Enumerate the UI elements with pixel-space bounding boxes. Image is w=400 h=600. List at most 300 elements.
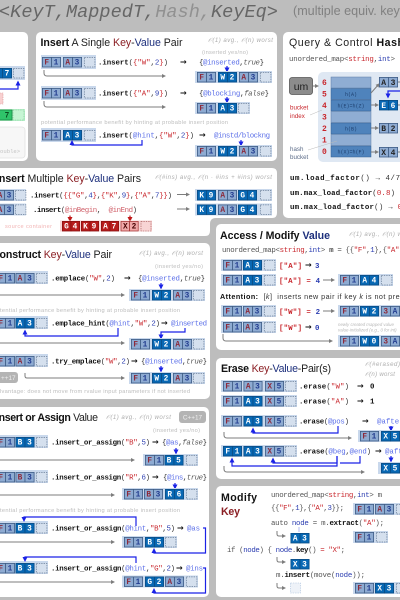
result row: W2 inserted	[195, 71, 272, 83]
row: erase range	[221, 445, 400, 472]
badge: C++17: ++17	[1, 375, 16, 382]
row: read W: A	[245, 325, 250, 333]
row: insert W: 1	[54, 60, 59, 68]
row: insert new R	[0, 470, 207, 495]
row: write A: 3	[255, 278, 260, 286]
code: extract node: auto node = m.extract("A");	[271, 520, 384, 528]
result row: B5: 1	[157, 458, 162, 466]
complexity note	[365, 361, 400, 378]
row: insert new R: →	[152, 473, 159, 482]
final map and empty node: 1	[367, 586, 372, 594]
panel: modify key	[216, 486, 400, 597]
diagram: hash table buckets: 1	[322, 136, 327, 146]
row: erase at position: 3	[255, 419, 260, 427]
row: emplace: →	[124, 274, 131, 283]
row: emplace: 1	[8, 276, 13, 284]
result row: emplace: W	[154, 293, 159, 301]
result row: hinted B5: B	[147, 540, 152, 548]
source container cells: 2	[132, 224, 137, 232]
result row: hinted G2: 1	[136, 579, 141, 587]
row: insert initializer list: A	[220, 193, 225, 201]
code: change key: if (node) { node.key() = "X";	[227, 547, 345, 555]
note: value-initialised: newly created mapped value	[338, 322, 394, 327]
diagram: hash table buckets: bucket	[290, 154, 309, 161]
row: assign existing B: B	[18, 440, 23, 448]
row: erase range: →	[375, 447, 382, 456]
result row: emplace: 3	[185, 293, 190, 301]
row: emplace_hint: @inserted	[171, 320, 207, 328]
result row: W0: A	[393, 339, 398, 347]
diagram: hash table buckets: A	[381, 79, 386, 88]
row: emplace: A	[18, 276, 23, 284]
row: insert new R: {@ins,true}	[163, 474, 207, 482]
row: insert A: A	[65, 91, 70, 99]
result row: R6: 6	[177, 492, 182, 500]
diagram: hash table buckets: E	[381, 103, 386, 111]
panel: construct key-value pair	[0, 243, 210, 399]
label: source container: source container	[5, 224, 52, 230]
row: hinted insert G: 1	[8, 566, 13, 574]
row: erase range: 1	[235, 449, 240, 457]
row: insert W: F	[44, 60, 49, 68]
row: insert W: →	[180, 58, 187, 67]
row: try_emplace: {@inserted,true}	[141, 358, 207, 366]
row: write W: F	[225, 309, 230, 317]
row: erase A: X	[267, 399, 272, 407]
row: hinted insert G: 3	[27, 566, 32, 574]
result row: A3 already present: 3	[230, 106, 235, 114]
source container cells: X	[123, 224, 128, 232]
result row: emplace_hint: 1	[143, 342, 148, 350]
row: write A: ["A"] = 4	[279, 278, 321, 286]
row: erase W: 1	[235, 384, 240, 392]
row: insert W: {@inserted,true}	[199, 59, 264, 67]
cells: initial map	[353, 503, 400, 515]
result row: R6: F	[126, 492, 131, 500]
result row: A3 already present: 1	[209, 106, 214, 114]
badge: C++17	[0, 372, 18, 383]
row: read A: ["A"]	[279, 263, 302, 271]
row: try_emplace: 1	[8, 359, 13, 367]
cells: initial map: 3	[387, 507, 392, 515]
row: hinted assign B: 3	[27, 526, 32, 534]
result row: W2 inserted with hint	[195, 145, 272, 157]
row: insert A: {@blocking,false}	[199, 90, 269, 98]
row: insert with hint: .insert(@hint,{"W",2})	[98, 132, 194, 140]
result row: after erase at position: X	[383, 434, 388, 442]
result row: A3 already present: F	[199, 106, 204, 114]
diagram: hash table buckets: 4	[322, 102, 327, 111]
complexity note: 𝒪(1) avg., 𝒪(n) worst	[139, 250, 203, 257]
row: insert A: 1	[54, 91, 59, 99]
code: get max load factor: um.max_load_factor() → 0	[290, 204, 400, 212]
row: write W	[221, 305, 400, 317]
heading: insert a single pair: Insert A Single Key-Value Pair	[40, 37, 183, 49]
result row: emplace_hint: 3	[185, 342, 190, 350]
diagram: hash table buckets: X	[381, 149, 386, 158]
panel: left partial panel: ouble>	[0, 148, 21, 155]
diagram: hash table buckets: B	[381, 125, 386, 134]
result row: try_emplace: A	[175, 376, 180, 384]
result row: R6: 3	[156, 492, 161, 500]
row: write A: A	[245, 278, 250, 286]
row: erase W: .erase("W")	[299, 383, 349, 391]
row: emplace: 3	[27, 276, 32, 284]
row: try_emplace: A	[18, 359, 23, 367]
diagram: hash table buckets: 4	[391, 149, 396, 158]
diagram: hash table buckets: 5	[322, 90, 327, 100]
note: value-initialised	[338, 322, 397, 332]
heading: modify key: Modify	[221, 492, 257, 504]
row: erase at position: 5	[277, 419, 282, 427]
result row: R6: B	[146, 492, 151, 500]
row: write W: 3	[383, 309, 388, 317]
row: insert with hint: A	[65, 133, 70, 141]
row: hinted assign B: .insert_or_assign(@hint,"B",5)	[51, 525, 175, 533]
row: read A: F	[225, 263, 230, 271]
cells: initial map: F	[357, 507, 362, 515]
badge: C++17	[179, 411, 206, 423]
row: insert initializer list: 3	[230, 193, 235, 201]
row: write A: 1	[352, 278, 357, 286]
changed node: X	[293, 562, 298, 570]
result row: W2 inserted: 3	[251, 75, 256, 83]
row: insert iterator range: 3	[7, 207, 12, 215]
heading: modify key	[221, 492, 257, 518]
row: write A	[221, 274, 393, 286]
row: erase at position: .erase(@pos)	[299, 418, 349, 426]
diagram: hash table buckets: bucket	[290, 104, 309, 112]
row: emplace	[0, 271, 205, 295]
result row: hinted B5	[122, 536, 177, 548]
row: insert with hint: 1	[54, 133, 59, 141]
result row: try_emplace: 1	[143, 376, 148, 384]
panel: insert multiple key-value pairs	[0, 168, 277, 236]
row: erase W: X	[267, 384, 272, 392]
diagram: hash table buckets: h(E)=h(Z)	[337, 104, 365, 110]
row: insert initializer list: 3	[7, 193, 12, 201]
result row: B5: F	[147, 458, 152, 466]
row: erase W: 5	[277, 384, 282, 392]
source container cells: K	[83, 224, 88, 232]
diagram: hash table buckets: 6	[322, 79, 327, 88]
result row: W2 inserted: W	[220, 75, 225, 83]
row: hinted assign B	[0, 517, 206, 553]
row: insert initializer list: 9	[209, 193, 214, 201]
row: insert W: 3	[75, 60, 80, 68]
note: hinting benefit: potential performance benefit by hinting at probable insert position	[41, 120, 228, 126]
diagram: hash table buckets: h(A)	[345, 92, 357, 98]
diagram: hash table buckets: 3	[391, 79, 396, 88]
row: hinted insert G: @ins	[186, 565, 203, 573]
source container cells: 4	[73, 224, 78, 232]
row: erase range: F	[225, 449, 230, 457]
row: erase at position: 1	[235, 419, 240, 427]
cells: initial map: A	[377, 507, 382, 515]
header: template signature: <KeyT,MappedT,Hash,KeyEq>	[0, 2, 278, 23]
row: assign existing B: {@as,false}	[162, 439, 207, 447]
diagram: hash table buckets: 3	[322, 114, 327, 122]
row: read A: A	[245, 263, 250, 271]
row: hinted insert G: .insert_or_assign(@hint,"G",2)	[51, 565, 175, 573]
row: read W: 1	[235, 325, 240, 333]
row: emplace_hint: A	[18, 321, 23, 329]
result row: R6	[122, 488, 198, 500]
row: write A: F	[342, 278, 347, 286]
result row: A3 already present	[195, 102, 250, 114]
row: hinted insert G: →	[176, 564, 183, 573]
row: assign existing B: 3	[27, 440, 32, 448]
source container cells	[60, 220, 152, 232]
code: map declaration: unordered_map<string,int>	[289, 56, 396, 64]
result row: hinted G2: F	[126, 579, 131, 587]
source container cells: G	[64, 224, 69, 232]
row: read W	[221, 321, 332, 341]
row: write W: A	[393, 309, 398, 317]
row: insert initializer list: K	[199, 193, 204, 201]
row: erase A: .erase("A")	[299, 398, 349, 406]
row: insert W: A	[65, 60, 70, 68]
diagram: hash table buckets: 2	[322, 125, 327, 134]
panel: access and modify value	[216, 224, 400, 350]
row: write A: 1	[235, 278, 240, 286]
row: emplace: {@inserted,true}	[138, 275, 205, 283]
row: insert A: 3	[75, 91, 80, 99]
result row: emplace	[129, 289, 205, 301]
row: erase A: F	[225, 399, 230, 407]
changed node: 3	[302, 562, 307, 570]
row: insert W	[41, 55, 264, 76]
row: insert with hint: @instd/blockng	[214, 132, 270, 140]
row: insert iterator range: 4	[250, 207, 255, 215]
row: read A: 3	[315, 263, 320, 271]
row: write W: 2	[372, 309, 377, 317]
result row: emplace: A	[175, 293, 180, 301]
source container cells: 9	[92, 224, 97, 232]
heading: access modify value: Access / Modify Value	[220, 230, 330, 242]
row: emplace_hint	[0, 316, 207, 343]
row: try_emplace	[0, 354, 207, 378]
row: hinted insert G	[0, 557, 206, 593]
diagram: hash table buckets: h(X)=h(F)	[337, 150, 365, 156]
result row: W2 inserted with hint: 3	[251, 149, 256, 157]
heading: erase pairs: Erase Key-Value-Pair(s)	[221, 363, 331, 375]
result row: hinted G2: 2	[157, 579, 162, 587]
row: read W: ["W"]	[279, 325, 302, 333]
extracted node and remaining map: A	[293, 536, 298, 544]
code: set max load factor: um.max_load_factor(0.8)	[290, 190, 395, 198]
result row: emplace: 2	[164, 293, 169, 301]
result row: emplace_hint	[129, 338, 205, 350]
source container cells: A	[103, 224, 108, 232]
result row: W0: W	[362, 339, 367, 347]
changed node	[277, 557, 309, 570]
row: insert new R: 1	[8, 475, 13, 483]
heading: modify key: Key	[221, 506, 240, 518]
result row: W2 inserted with hint: 1	[209, 149, 214, 157]
result row: hinted G2: G	[147, 579, 152, 587]
row: assign existing B: →	[152, 438, 159, 447]
row: insert A	[41, 86, 269, 107]
row: erase at position	[221, 415, 400, 438]
result row: B5: B	[167, 458, 172, 466]
result row: emplace_hint: W	[154, 342, 159, 350]
row: hinted assign B: →	[177, 524, 184, 533]
result row: try_emplace: F	[133, 376, 138, 384]
result row: W2 inserted with hint: A	[241, 149, 246, 157]
header: template signature	[0, 2, 400, 23]
result row: emplace: 1	[143, 293, 148, 301]
row: insert iterator range: A	[220, 207, 225, 215]
note: inserted yes/no: (inserted yes/no)	[202, 50, 248, 56]
row: insert with hint: →	[199, 131, 206, 140]
row: hinted insert G: B	[18, 566, 23, 574]
result row: after erase range	[378, 462, 400, 474]
result row: hinted G2	[122, 576, 198, 588]
row: hinted assign B: B	[18, 526, 23, 534]
complexity note: 𝒪(1) avg., 𝒪(n) worst	[106, 414, 171, 421]
result row: W2 inserted: 2	[230, 75, 235, 83]
cells: initial map: 1	[367, 507, 372, 515]
final map and empty node	[277, 582, 400, 594]
result row: hinted G2: 3	[177, 579, 182, 587]
row: insert W: .insert({"W",2})	[98, 59, 168, 67]
row: erase range: 3	[255, 449, 260, 457]
code: declaration: unordered_map<string,int> m	[271, 492, 383, 500]
row: write A: 4	[372, 278, 377, 286]
note: inserted yes/no: (inserted yes/no)	[153, 428, 200, 434]
panel: insert or assign value	[0, 407, 209, 597]
row: write W: ["W"] = 2	[279, 309, 320, 317]
row: erase W: 3	[255, 384, 260, 392]
row: read A: 1	[235, 263, 240, 271]
diagram: hash table buckets: 0	[322, 148, 327, 157]
row: assign existing B	[0, 435, 207, 460]
row: insert with hint: 3	[75, 133, 80, 141]
row: insert initializer list: .insert({{"G",4},{"K",9},{"A",7}})	[30, 192, 172, 200]
result row: hinted G2: A	[167, 579, 172, 587]
diagram: hash table buckets: index	[290, 113, 306, 120]
row: write A: A	[362, 278, 367, 286]
extracted node and remaining map: 1	[367, 535, 372, 543]
row: erase A	[221, 395, 375, 407]
row: emplace_hint: →	[161, 319, 168, 328]
row: emplace: .emplace("W",2)	[51, 275, 115, 283]
result row: W2 inserted: F	[199, 75, 204, 83]
result row: try_emplace	[129, 372, 205, 384]
row: erase A: 3	[255, 399, 260, 407]
result row: W2 inserted with hint: F	[199, 149, 204, 157]
note: hinting benefit: tential performance benefit by hinting at probable insert position	[0, 308, 180, 314]
result row: try_emplace: 3	[185, 376, 190, 384]
result row: W0: 1	[352, 339, 357, 347]
row: erase A: 1	[235, 399, 240, 407]
code: initialiser: {{"F",1},{"A",3}};	[271, 505, 344, 513]
note: value-initialised: value-initialized (e.g., 0 for int)	[338, 328, 397, 332]
row: erase range: A	[246, 449, 251, 457]
row: insert A: F	[44, 91, 49, 99]
diagram: hash table buckets: 6	[391, 103, 396, 111]
diagram: hash table buckets: um	[294, 81, 309, 93]
final map and empty node: 3	[387, 586, 392, 594]
row: emplace_hint: 3	[27, 321, 32, 329]
note: inserted yes/no: (inserted yes/no)	[155, 264, 203, 270]
result row: W2 inserted with hint: 2	[230, 149, 235, 157]
code: load factor: um.load_factor() → 4/7	[290, 175, 400, 183]
row: erase W: A	[246, 384, 251, 392]
extracted node and remaining map: F	[357, 535, 362, 543]
row: assign existing B: 1	[8, 440, 13, 448]
row: insert with hint: F	[44, 133, 49, 141]
row: insert iterator range	[0, 204, 272, 220]
note: hinting benefit: tential performance benefit by hinting at probable insert position	[0, 508, 180, 514]
row: emplace_hint: .emplace_hint(@hint,"W",2)	[51, 320, 160, 328]
result row: A3 already present: A	[220, 106, 225, 114]
result row: emplace_hint: 2	[164, 342, 169, 350]
row: write W: W	[362, 309, 367, 317]
row: read A	[221, 259, 320, 271]
row: write W: A	[245, 309, 250, 317]
row: hinted assign B: @as	[187, 525, 200, 533]
diagram: hash table buckets: hash	[290, 146, 304, 153]
row: erase W: 0	[370, 383, 375, 391]
row: insert initializer list	[0, 189, 272, 201]
row: write A: F	[225, 278, 230, 286]
result row: hinted B5: 1	[136, 540, 141, 548]
row: erase at position: F	[225, 419, 230, 427]
panel: erase key-value pairs	[216, 358, 400, 479]
row: erase W: →	[357, 382, 364, 391]
row: erase W: F	[225, 384, 230, 392]
result row: R6: R	[167, 492, 172, 500]
result row: hinted B5: 5	[157, 540, 162, 548]
row: assign existing B: .insert_or_assign("B",5)	[51, 439, 150, 447]
complexity note: 𝒪(n) worst	[365, 371, 395, 378]
complexity note: 𝒪(#ins) avg., 𝒪(n · #ins + #ins) worst	[155, 174, 272, 181]
result row: after erase range: 5	[393, 466, 398, 474]
result row: hinted B5: F	[126, 540, 131, 548]
row: read A: 3	[255, 263, 260, 271]
row: write W: 1	[235, 309, 240, 317]
row: insert iterator range: 3	[230, 207, 235, 215]
result row: B5	[143, 454, 198, 466]
row: read W: 0	[315, 325, 320, 333]
result row: W0	[338, 335, 400, 347]
row: erase range: X	[267, 449, 272, 457]
extracted node and remaining map	[277, 527, 388, 544]
row: erase range: 5	[277, 449, 282, 457]
row: erase at position: A	[246, 419, 251, 427]
row: insert iterator range: G	[240, 207, 245, 215]
result row: W0: 0	[372, 339, 377, 347]
row: insert iterator range: .insert(@inBegin, @inEnd)	[33, 207, 137, 215]
diagram: hash table buckets	[290, 72, 400, 162]
row: try_emplace: .try_emplace("W",2)	[51, 358, 130, 366]
result row: after erase range: X	[383, 466, 388, 474]
result row: after erase at position: 1	[372, 434, 377, 442]
diagram: hash table buckets: 2	[391, 125, 396, 134]
result row: after erase at position: 5	[393, 434, 398, 442]
row: read W: →	[305, 323, 312, 332]
row: hinted assign B: 1	[8, 526, 13, 534]
row: read W: 3	[255, 325, 260, 333]
row: write W: 1	[352, 309, 357, 317]
source container cells: 7	[112, 224, 117, 232]
result row: R6: 1	[136, 492, 141, 500]
result row: after erase at position	[358, 430, 400, 442]
result row: B5: 5	[176, 458, 181, 466]
row: insert initializer list: G	[240, 193, 245, 201]
